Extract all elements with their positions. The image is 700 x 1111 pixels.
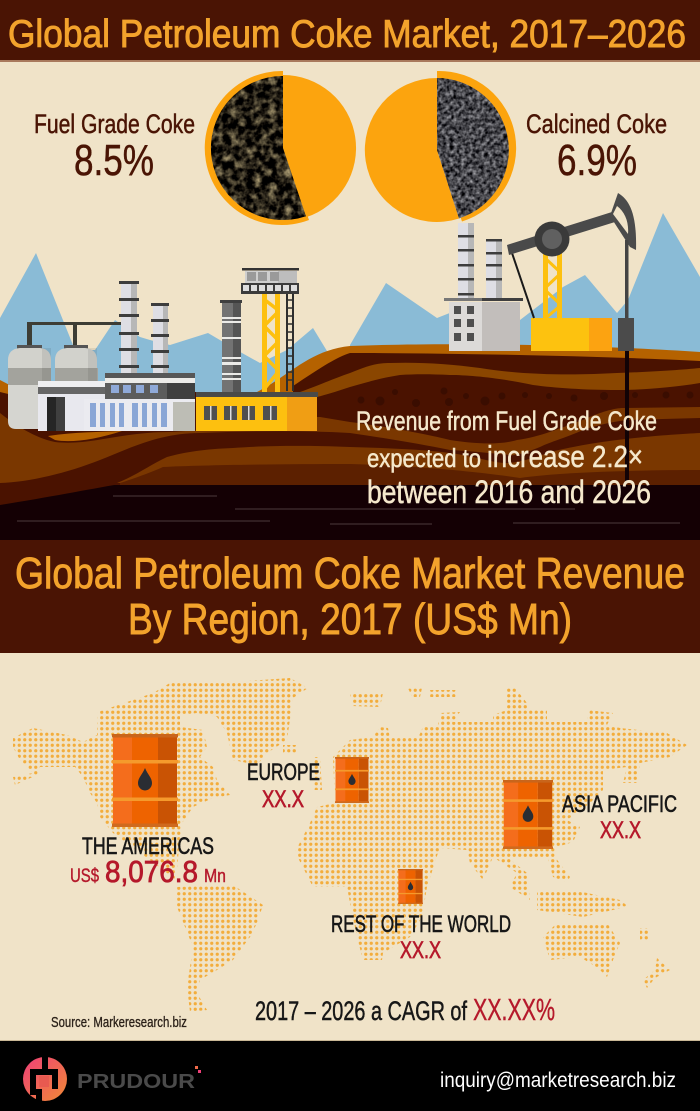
cagr text: 2017 – 2026 a CAGR of <box>255 996 467 1026</box>
label: rest of the world: XX.X <box>400 937 441 964</box>
storage tanks <box>8 345 98 429</box>
yellow building <box>196 392 318 431</box>
callout: revenue text <box>356 406 657 510</box>
pie: calcined coke <box>365 71 516 222</box>
footer <box>0 1040 700 1111</box>
dotted world map <box>13 678 687 1012</box>
label: calcined coke <box>526 109 667 185</box>
label: the americas: 8,076.8 <box>105 854 198 889</box>
barrel: europe <box>335 757 369 803</box>
watch tower <box>241 268 299 392</box>
heading: revenue by region: By Region, 2017 (US$ Mn) <box>128 595 572 644</box>
label: asia pacific <box>562 791 677 844</box>
label: the americas: Mn <box>204 866 226 886</box>
label: rest of the world <box>331 911 511 964</box>
pipes <box>27 322 121 346</box>
cagr text: XX.XX% <box>473 992 555 1027</box>
chimneys <box>119 281 169 373</box>
logo: prudour: PRUDOUR <box>77 1071 196 1093</box>
mountains <box>0 213 700 420</box>
logo: prudour <box>23 1057 201 1101</box>
title band <box>0 0 700 62</box>
label: asia pacific: XX.X <box>600 817 641 844</box>
callout: revenue text: increase 2.2× <box>487 439 643 474</box>
label: calcined coke: 6.9% <box>557 136 637 185</box>
refinery: left plant <box>8 268 318 431</box>
label: calcined coke: Calcined Coke <box>526 109 667 139</box>
barrel: the americas <box>112 734 178 827</box>
label: fuel grade coke: 8.5% <box>74 136 154 185</box>
label: fuel grade coke: Fuel Grade Coke <box>34 109 195 139</box>
pump jack <box>507 193 636 481</box>
grey chimney <box>220 300 242 393</box>
main building <box>38 373 195 431</box>
factory building <box>444 298 523 351</box>
label: europe: EUROPE <box>247 759 320 786</box>
label: fuel grade coke <box>34 109 195 185</box>
label: europe <box>247 759 320 813</box>
underground strata <box>0 344 700 540</box>
pie: fuel grade coke <box>205 70 356 225</box>
heading: revenue by region <box>0 540 700 653</box>
source: Source: Markeresearch.biz <box>51 1014 187 1031</box>
label: rest of the world: REST OF THE WORLD <box>331 911 511 938</box>
label: the americas: US$ <box>70 866 99 887</box>
label: the americas: THE AMERICAS <box>82 833 214 860</box>
label: europe: XX.X <box>262 786 304 813</box>
barrel: asia pacific <box>503 780 553 849</box>
barrel: rest of the world <box>398 869 423 904</box>
email: inquiry@marketresearch.biz <box>440 1069 676 1092</box>
label: the americas <box>70 833 226 889</box>
refinery: right plant <box>444 193 636 481</box>
callout: revenue text: expected to <box>367 443 481 473</box>
chimneys <box>458 223 502 299</box>
